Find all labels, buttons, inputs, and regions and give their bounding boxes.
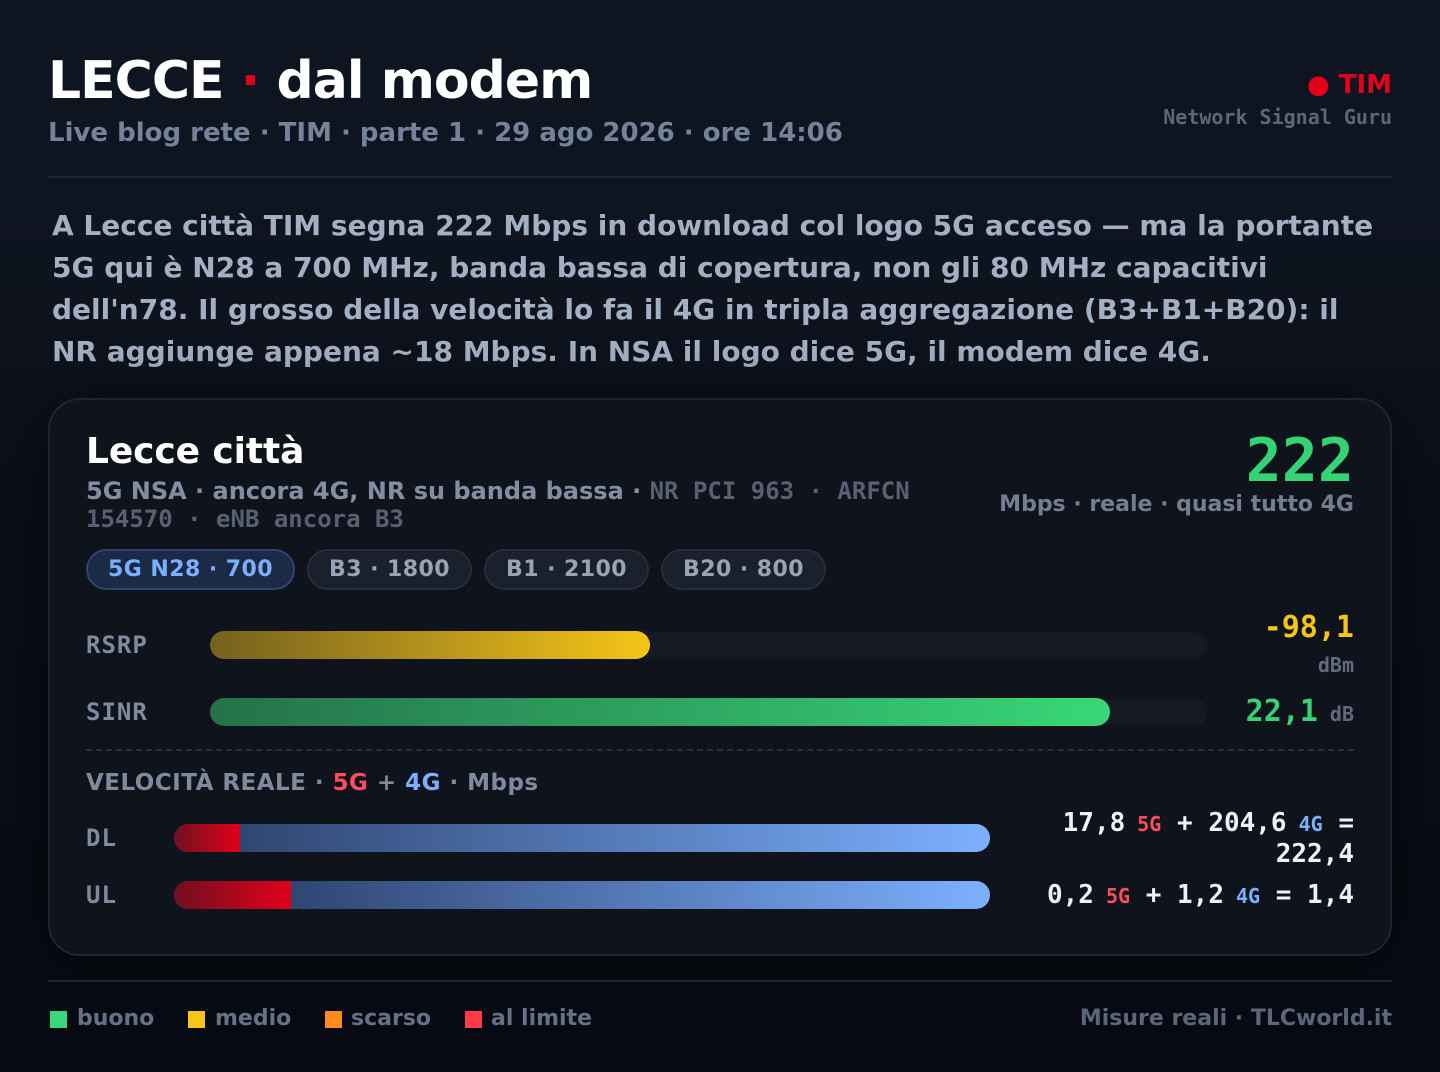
DL row [86, 808, 1354, 869]
pill: B3: B3 · 1800 [329, 557, 450, 582]
panel: Lecce città [48, 398, 1392, 956]
headline speed caption: Mbps · reale · quasi tutto 4G [999, 492, 1354, 517]
legend: al limite: al limite [491, 1006, 592, 1031]
DL stacked bar [174, 824, 990, 852]
RSRP unit: dBm [1318, 653, 1354, 677]
UL stacked bar [174, 881, 990, 909]
SINR row [86, 694, 1354, 729]
UL row [86, 880, 1354, 910]
pill: B3 [307, 549, 472, 590]
headline speed value: 222 [1246, 426, 1354, 496]
pill: 5G N28: 5G N28 · 700 [108, 557, 273, 582]
panel heading: Lecce città [86, 431, 304, 472]
footer divider [48, 980, 1392, 982]
DL value: 222,4 [1276, 839, 1354, 869]
SINR bar [210, 698, 1208, 726]
panel subheading [86, 477, 910, 533]
legend [50, 1006, 592, 1031]
UL 4G segment [291, 881, 990, 909]
legend: scarso: scarso [351, 1006, 431, 1031]
DL 5G segment [174, 824, 240, 852]
DL 4G segment [240, 824, 990, 852]
RSRP bar [210, 631, 1208, 659]
pill: B1: B1 · 2100 [506, 557, 627, 582]
pill: B20: B20 · 800 [683, 557, 804, 582]
source label: Network Signal Guru [1163, 105, 1392, 129]
pill: B20 [661, 549, 826, 590]
intro text: 5G qui è N28 a 700 MHz, banda bassa di copertura, non gli 80 MHz capacitivi [52, 251, 1268, 284]
DL label: DL [86, 824, 117, 852]
RSRP row [86, 610, 1354, 677]
SINR value: 22,1 dB [1246, 694, 1354, 729]
DL value [1063, 808, 1354, 869]
legend: medio: medio [215, 1006, 291, 1031]
intro text: NR aggiunge appena ~18 Mbps. In NSA il logo dice 5G, il modem dice 4G. [52, 335, 1211, 368]
footer credit: Misure reali · TLCworld.it [1080, 1006, 1392, 1031]
header divider [48, 176, 1392, 178]
subtitle: Live blog rete · TIM · parte 1 · 29 ago 2026 · ore 14:06 [48, 118, 843, 148]
RSRP label: RSRP [86, 631, 148, 659]
intro text: A Lecce città TIM segna 222 Mbps in download col logo 5G acceso — ma la portante [52, 209, 1373, 242]
UL 5G segment [174, 881, 291, 909]
panel subheading: 5G NSA · ancora 4G, NR su banda bassa · NR PCI 963 · ARFCN [86, 477, 910, 505]
speed section heading: VELOCITÀ REALE · 5G + 4G · Mbps [86, 770, 539, 796]
SINR label: SINR [86, 698, 148, 726]
pill: B1 [484, 549, 649, 590]
panel subheading: 154570 · eNB ancora B3 [86, 505, 404, 533]
dashed divider [86, 749, 1354, 751]
band pills [86, 549, 826, 590]
pill: 5G N28 [86, 549, 295, 590]
intro text [52, 209, 1373, 368]
UL label: UL [86, 881, 117, 909]
UL value: 0,2 5G + 1,2 4G = 1,4 [1047, 880, 1354, 910]
legend: buono: buono [77, 1006, 154, 1031]
DL value: 17,8 5G + 204,6 4G = [1063, 808, 1354, 838]
RSRP value: -98,1 [1264, 610, 1354, 645]
operator badge: TIM: ● TIM [1307, 70, 1392, 100]
title: LECCE · dal modem [48, 51, 592, 111]
intro text: dell'n78. Il grosso della velocità lo fa il 4G in tripla aggregazione (B3+B1+B20): il [52, 293, 1338, 326]
